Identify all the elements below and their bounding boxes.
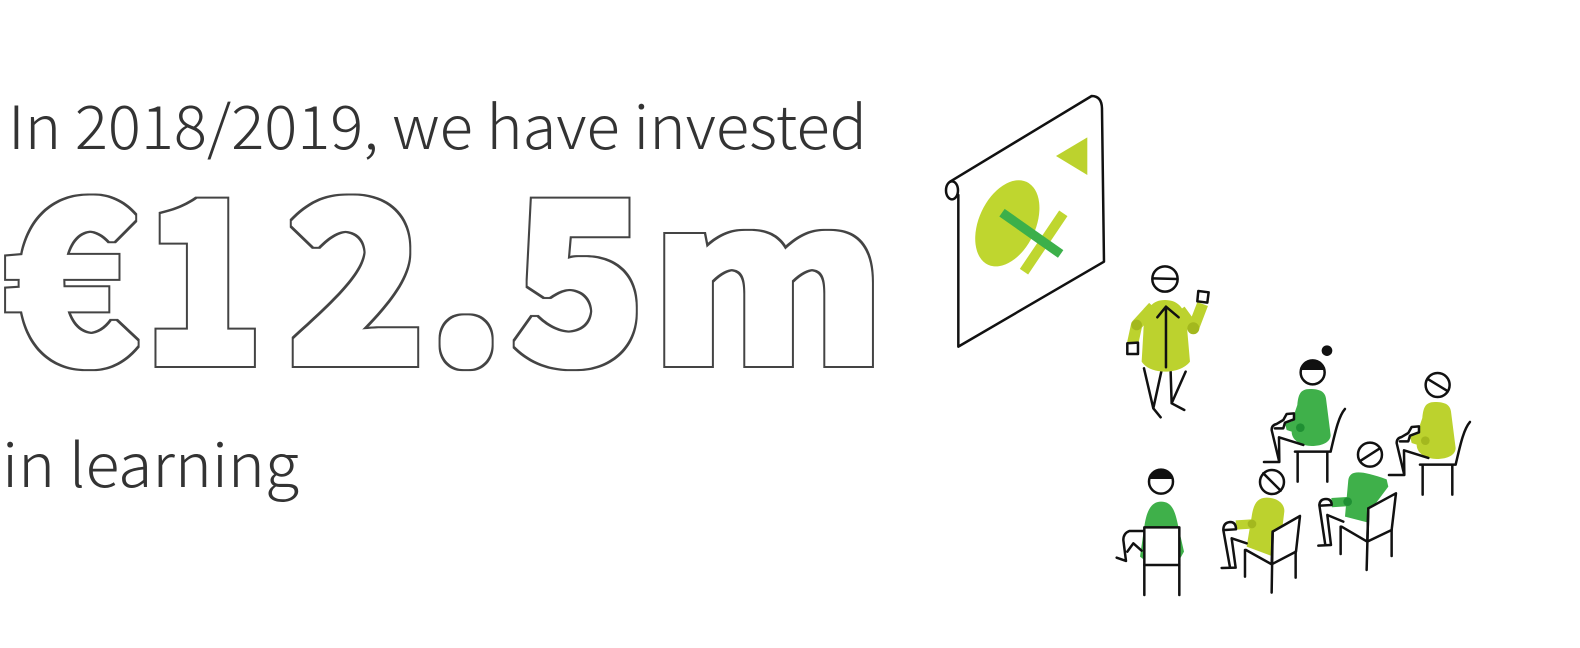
- heading: intro line: In 2018/2019, we have invested: [8, 80, 867, 167]
- big number: €12.5m: 1: [143, 103, 264, 429]
- illustration: projection screen: [946, 96, 1104, 347]
- text: in learning: in learning: [2, 418, 299, 505]
- figure: seated person top: [1264, 345, 1345, 482]
- figure: seated person bottom right: [1318, 443, 1396, 570]
- icon: dark bar: [1002, 213, 1061, 254]
- big number: €12.5m: .: [427, 103, 505, 429]
- figure: seated person right: [1389, 402, 1470, 495]
- big number: €12.5m: [3, 103, 886, 429]
- big number: €12.5m: €: [3, 103, 138, 429]
- figure: seated person bottom middle: [1222, 470, 1300, 593]
- big number: €12.5m: 2: [286, 103, 427, 429]
- icon: ellipse: [962, 170, 1052, 277]
- big number: €12.5m: m: [650, 103, 886, 429]
- figure: presenter: [1127, 266, 1209, 417]
- big number: €12.5m: 5: [511, 103, 646, 429]
- icon: head of seated person right: [1426, 373, 1450, 397]
- icon: triangle: [1056, 137, 1087, 175]
- icon: light bar: [1024, 213, 1063, 272]
- figure: seated person from behind: [1117, 470, 1184, 595]
